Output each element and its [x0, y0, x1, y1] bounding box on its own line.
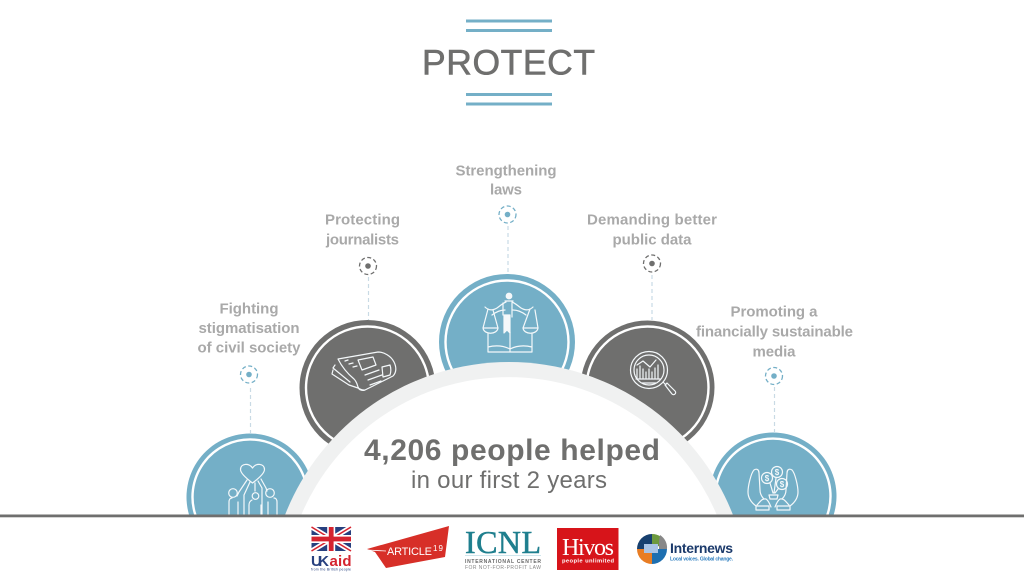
logo: UK aid: aid: [330, 553, 352, 570]
circle: strengthening laws: [439, 274, 575, 410]
logo: Article 19: 19: [433, 544, 444, 553]
icon: dollar signs: $: [765, 474, 770, 483]
label: Strengthening laws: [456, 162, 556, 198]
label: Strengthening laws: laws: [490, 182, 522, 198]
label: Promoting a financially sustainable media: Promoting a: [730, 304, 818, 320]
circle: fighting stigmatisation: [187, 434, 314, 515]
label: Protecting journalists: [325, 212, 400, 248]
logo: Hivos: people unlimited: [562, 558, 614, 564]
logo: Internews: Internews: [670, 540, 733, 556]
label: Fighting stigmatisation of civil society: Fighting: [220, 300, 278, 318]
footer rule: [0, 514, 1024, 517]
label: Promoting a financially sustainable media: financially sustainable: [696, 324, 853, 340]
icon: dollar signs: $: [775, 468, 780, 477]
logo: Internews: Local voices. Global change.: [670, 556, 734, 562]
label: Fighting stigmatisation of civil society: of civil society: [198, 340, 301, 356]
logo: Hivos: [557, 528, 618, 570]
label: Promoting a financially sustainable media: [696, 304, 853, 360]
marker: strengthening laws: [499, 206, 516, 272]
icon: heart and people: [229, 464, 277, 515]
label: Fighting stigmatisation of civil society: [198, 300, 301, 356]
marker: protecting journalists: [360, 258, 376, 320]
circle: protecting journalists: [300, 320, 436, 456]
logo: Hivos: Hivos: [562, 535, 614, 561]
label: Protecting journalists: Protecting: [325, 212, 400, 228]
label: Demanding better public data: [587, 212, 717, 248]
icon: newspaper: [332, 352, 396, 390]
label: Fighting stigmatisation of civil society: stigmatisation: [198, 320, 300, 337]
logo: Article 19: ARTICLE: [387, 546, 432, 558]
logo: UK aid: from the British people: [311, 568, 351, 572]
heading: PROTECT with bars: PROTECT: [422, 42, 595, 82]
logo: UK aid: [311, 527, 352, 572]
icon: magnifier with chart: [630, 352, 676, 395]
icon: scales and book: [483, 293, 538, 352]
icon: dollar signs: [765, 468, 785, 489]
label: Demanding better public data: public data: [612, 232, 692, 248]
circle: sustainable media: [709, 433, 836, 515]
marker: fighting stigmatisation: [240, 366, 258, 433]
logo: UK aid: UK: [311, 553, 329, 570]
semicircle diagram: [187, 274, 837, 515]
icon: dollar signs: $: [780, 480, 785, 489]
circle: demanding public data: [580, 320, 714, 454]
logo: ICNL: ICNL: [465, 524, 541, 560]
heading: PROTECT with bars: [422, 20, 595, 106]
label: Promoting a financially sustainable media: media: [752, 344, 796, 360]
marker: public data: [644, 255, 660, 320]
label: Demanding better public data: Demanding better: [587, 212, 717, 228]
logo: ICNL: FOR NOT-FOR-PROFIT LAW: [465, 565, 541, 571]
logo: Article 19: [367, 526, 449, 568]
central stat text: [364, 434, 660, 494]
label: Strengthening laws: Strengthening: [456, 162, 556, 180]
central stat text: 4,206 people helped: [364, 434, 660, 467]
logo: Internews: [637, 534, 734, 564]
marker: sustainable media: [766, 368, 782, 432]
central arc: [285, 362, 733, 515]
central stat text: in our first 2 years: [411, 467, 607, 494]
logo: ICNL: INTERNATIONAL CENTER: [465, 559, 541, 565]
label: Protecting journalists: journalists: [325, 232, 399, 248]
icon: hands and coins: [748, 466, 798, 510]
